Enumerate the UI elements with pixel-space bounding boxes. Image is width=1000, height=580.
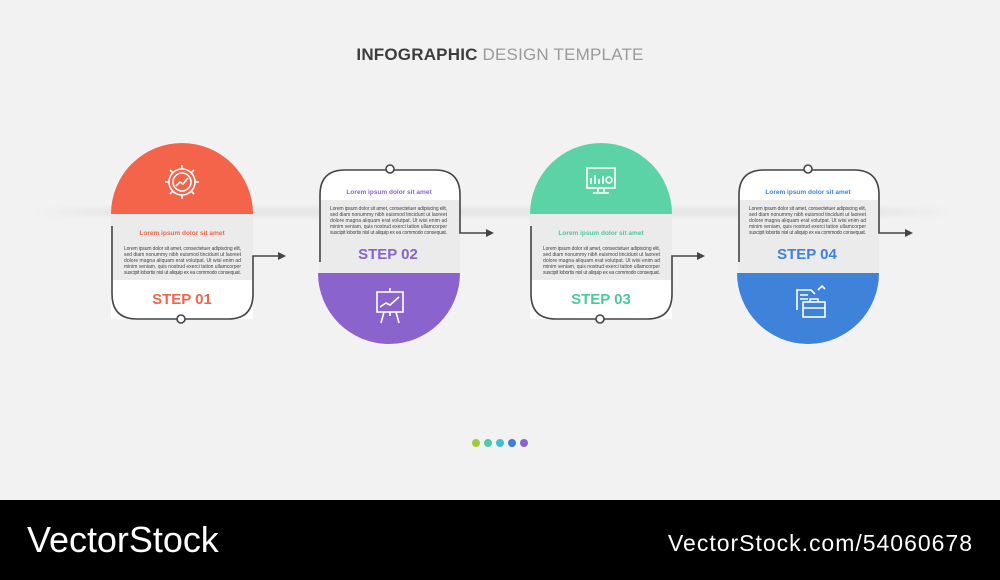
step 03 text: Lorem ipsum dolor sit amet <box>558 230 644 237</box>
step 03 text: sed diam nonummy nibh euismod tincidunt ut laoreet <box>543 252 661 258</box>
step 03 text: dolore magna aliquam erat volutpat. Ut wisi enim ad <box>543 258 660 264</box>
step 01 text: minim veniam, quis nostrud exerci tation ullamcorper <box>124 264 241 270</box>
connector line arrow <box>739 165 913 262</box>
step 04 text: Lorem ipsum dolor sit amet, consectetuer adipiscing elit, <box>749 206 866 212</box>
step 04 text: suscipit lobortis nisl ut aliquip ex ea commodo consequat. <box>749 230 866 236</box>
title: INFOGRAPHIC DESIGN TEMPLATE <box>356 45 644 64</box>
connector line arrow <box>531 226 705 323</box>
step 01 text: Lorem ipsum dolor sit amet <box>139 230 225 237</box>
panel: step 02 <box>318 165 494 344</box>
step 01 text <box>124 230 242 308</box>
step 04 text <box>749 189 867 263</box>
step 02 text: Lorem ipsum dolor sit amet, consectetuer adipiscing elit, <box>330 206 447 212</box>
panel: step 04 <box>737 165 913 344</box>
step 02 text: Lorem ipsum dolor sit amet <box>346 189 432 196</box>
step 03 text: minim veniam, quis nostrud exerci tation ullamcorper <box>543 264 660 270</box>
step 01 text: Lorem ipsum dolor sit amet, consectetuer adipiscing elit, <box>124 246 241 252</box>
step 02 text: sed diam nonummy nibh euismod tincidunt ut laoreet <box>330 212 448 218</box>
step 02 text: STEP 02 <box>358 246 418 263</box>
red semicircle with gear icon <box>111 143 253 214</box>
connector line arrow <box>112 226 286 323</box>
step 03 text <box>543 230 661 308</box>
step 04 text: dolore magna aliquam erat volutpat. Ut wisi enim ad <box>749 218 866 224</box>
footer <box>0 500 1000 580</box>
step 02 text: dolore magna aliquam erat volutpat. Ut wisi enim ad <box>330 218 447 224</box>
panel: step 03 <box>530 143 705 323</box>
step 04 text: Lorem ipsum dolor sit amet <box>765 189 851 196</box>
step 04 text: STEP 04 <box>777 246 838 263</box>
blue semicircle with briefcase icon <box>737 273 879 344</box>
step 02 text: suscipit lobortis nisl ut aliquip ex ea commodo consequat. <box>330 230 447 236</box>
step 04 text: sed diam nonummy nibh euismod tincidunt ut laoreet <box>749 212 867 218</box>
step 02 text: minim veniam, quis nostrud exerci tation ullamcorper <box>330 224 447 230</box>
step 03 text: Lorem ipsum dolor sit amet, consectetuer adipiscing elit, <box>543 246 660 252</box>
green semicircle with monitor icon <box>530 143 672 214</box>
footer: VectorStock <box>27 519 220 560</box>
step 01 text: sed diam nonummy nibh euismod tincidunt ut laoreet <box>124 252 242 258</box>
step 01 text: suscipit lobortis nisl ut aliquip ex ea commodo consequat. <box>124 270 241 276</box>
step 02 text <box>330 189 448 263</box>
step 03 text: suscipit lobortis nisl ut aliquip ex ea commodo consequat. <box>543 270 660 276</box>
purple semicircle with chart icon <box>318 273 460 344</box>
step 01 text: dolore magna aliquam erat volutpat. Ut wisi enim ad <box>124 258 241 264</box>
footer: VectorStock.com/54060678 <box>668 530 972 556</box>
step 03 text: STEP 03 <box>571 291 631 308</box>
pagination dots <box>472 439 528 447</box>
connector line arrow <box>320 165 494 262</box>
step 04 text: minim veniam, quis nostrud exerci tation ullamcorper <box>749 224 866 230</box>
panel: step 01 <box>111 143 286 323</box>
step 01 text: STEP 01 <box>152 291 212 308</box>
